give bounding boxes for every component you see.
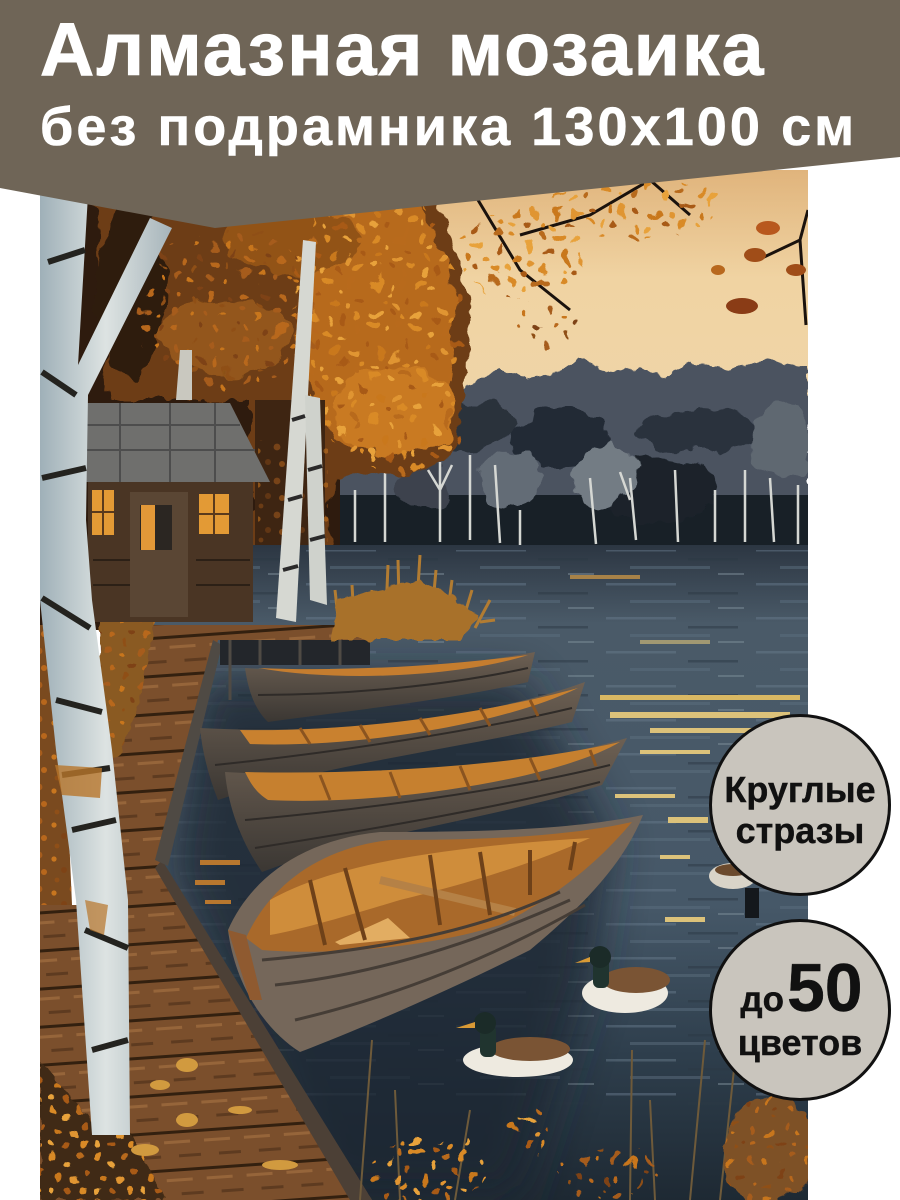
badge: up to 50 colours: цветов [738, 1022, 862, 1063]
badge: up to 50 colours: до50 [740, 950, 863, 1026]
painting: autumn lake scene [40, 170, 808, 1200]
dark forest on far shore [320, 358, 810, 547]
badge: up to 50 colours [709, 919, 891, 1101]
duck, far right [709, 863, 759, 918]
boat 1 [245, 652, 535, 722]
foreground reeds and autumn grass [100, 555, 815, 1200]
duck, centre [575, 946, 670, 1013]
left edge foliage and ground [40, 625, 165, 1200]
fallen leaves on boardwalk [131, 1058, 298, 1170]
sky [436, 170, 808, 396]
duck, lower [456, 1012, 573, 1077]
title: Алмазная мозаика [40, 7, 766, 91]
cabin [85, 403, 270, 622]
boat 2 [200, 682, 585, 800]
header banner [0, 0, 900, 228]
boat 4, front [228, 815, 643, 1052]
badge: round rhinestones: Круглые [724, 769, 876, 810]
overhanging branch with leaves [460, 173, 808, 347]
large birch tree [40, 195, 172, 1135]
boardwalk and jetty [40, 625, 375, 1200]
autumn trees, left background [40, 185, 470, 630]
boat 3 [225, 738, 627, 872]
badge: round rhinestones: стразы [736, 810, 864, 851]
lake [150, 545, 808, 1200]
water ripples [195, 575, 800, 922]
badge: round rhinestones [709, 714, 891, 896]
thin birch trees [276, 240, 327, 622]
subtitle: без подрамника 130х100 см [40, 97, 857, 157]
